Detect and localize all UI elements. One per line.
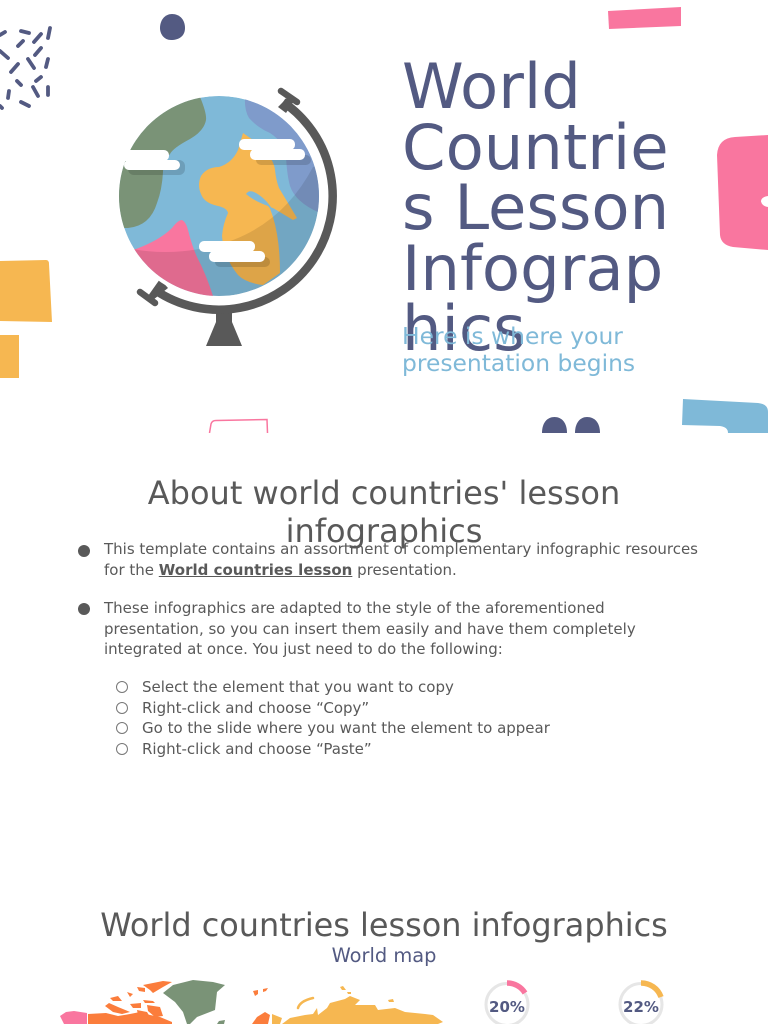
chart: 20% ring: 20% bbox=[489, 998, 525, 1016]
title: World Countries Lesson Infographics bbox=[402, 50, 669, 365]
decoration: navy bumps bbox=[542, 417, 600, 433]
hero slide with decorations and globe bbox=[0, 7, 768, 433]
map: Novaya Zemlya bbox=[298, 998, 313, 1008]
decoration: yellow blocks bbox=[0, 260, 52, 378]
bullet 2 bbox=[78, 603, 90, 615]
chart: 22% ring: 22% bbox=[623, 998, 659, 1016]
map: Alaska bbox=[60, 1011, 87, 1024]
text block 1 bbox=[104, 540, 698, 579]
map: Svalbard bbox=[253, 988, 268, 996]
sub-list: Right-click and choose “Paste” bbox=[142, 740, 372, 758]
text block 2: presentation, so you can insert them easily and have them completely bbox=[104, 620, 636, 638]
chart: 20% ring bbox=[486, 983, 528, 1024]
heading: infographics: World countries lesson infographics bbox=[100, 906, 668, 944]
text block 2: These infographics are adapted to the style of the aforementioned bbox=[104, 599, 605, 617]
white gap between stand and sphere bbox=[115, 92, 323, 300]
sub-list bbox=[116, 678, 550, 758]
heading: about: About world countries' lesson infographics bbox=[148, 474, 620, 550]
globe sphere bbox=[119, 96, 319, 296]
panel: body text bbox=[78, 540, 698, 758]
bullet 1 bbox=[78, 545, 90, 557]
icon: globe bbox=[100, 90, 340, 346]
subtitle: Here is where your presentation begins bbox=[402, 322, 635, 377]
text block 2: integrated at once. You just need to do the following: bbox=[104, 640, 503, 658]
clouds bbox=[120, 139, 311, 267]
text block 1: for the World countries lesson presentation. bbox=[104, 561, 457, 579]
decoration: pink top strip bbox=[608, 7, 681, 29]
world map bbox=[60, 980, 664, 1024]
sub-list: Go to the slide where you want the element to appear bbox=[142, 719, 550, 737]
decoration: pink right block bbox=[717, 135, 768, 250]
map: Russia bbox=[272, 986, 443, 1024]
subheading: world map: World map bbox=[332, 944, 436, 967]
text block 2 bbox=[104, 599, 636, 658]
decoration: blue block bbox=[682, 399, 768, 433]
decoration: navy dot bbox=[160, 14, 185, 40]
text block 1: This template contains an assortment of complementary infographic resources bbox=[104, 540, 698, 558]
decoration: pink outline block bbox=[210, 420, 268, 433]
map: Greenland bbox=[163, 980, 225, 1024]
map: Canada bbox=[88, 981, 172, 1024]
map: Europe bbox=[252, 1012, 270, 1024]
globe stand bbox=[140, 91, 333, 346]
sub-list: Select the element that you want to copy bbox=[142, 678, 454, 696]
decoration: navy dash pattern bbox=[0, 28, 50, 108]
chart: 22% ring bbox=[620, 983, 662, 1024]
sub-list: Right-click and choose “Copy” bbox=[142, 698, 369, 716]
